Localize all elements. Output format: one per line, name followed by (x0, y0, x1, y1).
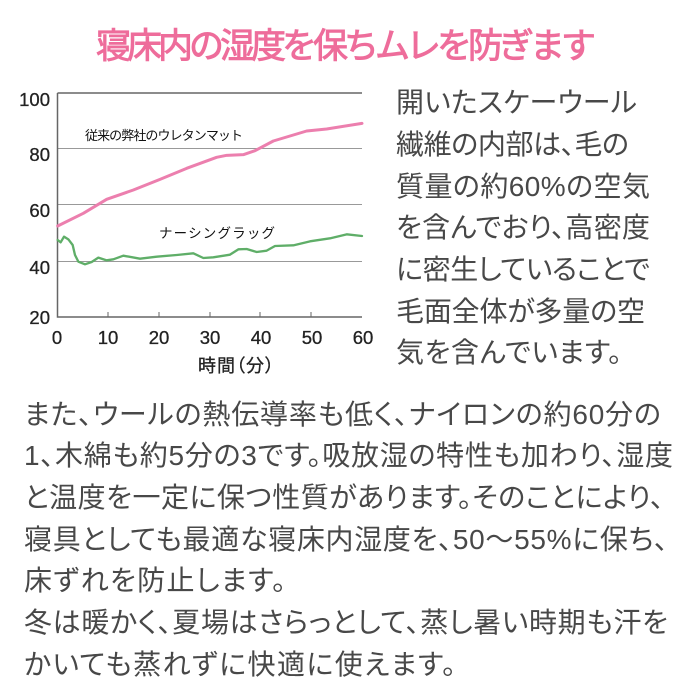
x axis labels: 30 (200, 327, 220, 348)
x axis labels: 20 (149, 327, 169, 348)
text block: right column: 毛面全体が多量の空 (396, 296, 645, 327)
text block: lower paragraph: また、ウールの熱伝導率も低く、ナイロンの約60分の (24, 399, 661, 430)
line: urethane mat (58, 123, 362, 226)
x axis labels: 50 (302, 327, 322, 348)
text block: right column (396, 87, 650, 368)
plot frame and grid (57, 93, 362, 317)
y axis labels: 100 (19, 89, 50, 110)
label: nursing rug: ナーシングラッグ (159, 226, 275, 241)
y axis labels: 40 (29, 257, 50, 278)
chart: bedding humidity over time (19, 89, 373, 376)
text block: right column: を含んでおり、高密度 (396, 212, 650, 243)
text block: right column: 開いたスケーウール (396, 87, 637, 118)
text block: lower paragraph: 床ずれを防止します。 (24, 565, 286, 596)
x axis labels (52, 327, 373, 348)
x axis labels: 40 (251, 327, 271, 348)
text block: right column: 気を含んでいます。 (396, 337, 622, 368)
y axis labels: 80 (29, 144, 50, 165)
y axis labels: 60 (29, 200, 50, 221)
text block: lower paragraph: かいても蒸れずに快適に使えます。 (24, 649, 456, 680)
line: nursing rug (58, 234, 362, 264)
x axis title: 時間（分） (198, 356, 274, 376)
label: urethane mat: 従来の弊社のウレタンマット (85, 128, 243, 143)
text block: right column: 質量の約60%の空気 (396, 171, 650, 202)
text block: right column: 繊維の内部は、毛の (396, 129, 629, 160)
x axis labels: 60 (353, 327, 373, 348)
y axis labels (19, 89, 50, 328)
x axis labels: 10 (98, 327, 118, 348)
y axis labels: 20 (29, 307, 50, 328)
text block: lower paragraph: 1、木綿も約5分の3です。吸放湿の特性も加わり、湿度 (24, 440, 673, 471)
title: 寝床内の湿度を保ちムレを防ぎます (96, 27, 596, 66)
text block: lower paragraph: と温度を一定に保つ性質があります。そのことにより、 (24, 482, 664, 513)
x axis labels: 0 (52, 327, 62, 348)
text block: lower paragraph: 寝具としても最適な寝床内湿度を、50～55%に保ち、 (24, 524, 668, 555)
text block: lower paragraph (24, 399, 673, 680)
text block: right column: に密生していることで (396, 254, 650, 285)
text block: lower paragraph: 冬は暖かく、夏場はさらっとして、蒸し暑い時期も汗を (24, 607, 668, 638)
